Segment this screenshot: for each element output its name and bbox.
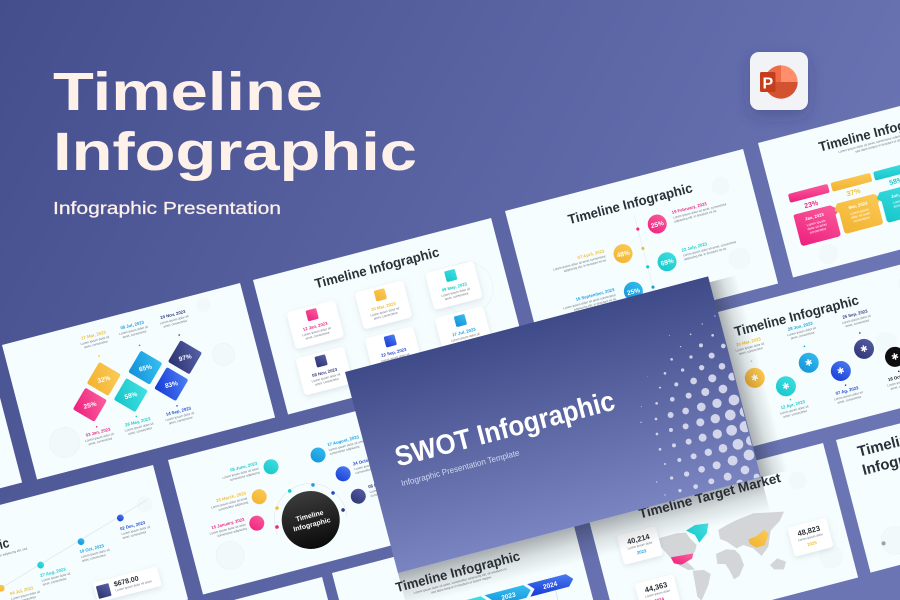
label: 08 Jul — [117, 319, 152, 350]
milestone: 08 June: consectetur adipiscing — [229, 470, 260, 482]
panel: world map slide — [585, 443, 858, 600]
stat card: 44,363: Lorem ipsum dolor — [645, 588, 671, 599]
stat card: 40,214 — [617, 526, 663, 565]
stat card: 48,823 — [787, 518, 834, 557]
milestone: 28 Jun: amet, consectetur — [790, 330, 815, 340]
milestone: 07 Aug: amet, consectetur — [837, 395, 862, 405]
milestone: 12 Apr: 12 Apr, 2023 — [780, 399, 806, 410]
panel: card timeline slide — [253, 218, 526, 415]
milestone: 20 Mar: amet, consectetur — [738, 346, 763, 356]
milestone: 10 Oct: amet, consectetur — [81, 553, 106, 563]
milestone: 69% July: 69% — [660, 258, 675, 268]
milestone: 08 June: Lorem ipsum dolor sit amet — [222, 466, 259, 480]
milestone: 48% April: adipiscing elit, in tincidunt mi mi. — [563, 258, 607, 273]
column: 37% Mar — [828, 171, 888, 235]
title — [856, 424, 900, 479]
label: 08 Jul: 08 Jul, 2023 — [120, 319, 145, 331]
title: Timeline Target Market — [637, 470, 783, 521]
milestone: 25% February: 25% — [650, 220, 665, 230]
diamond: 97%: 97% — [178, 353, 193, 363]
card: 17 Jul: amet, consectetur — [454, 336, 479, 346]
milestone: 25% September: Lorem ipsum dolor sit amet consectetur — [563, 293, 616, 310]
column: 37% Mar: consectetur — [853, 215, 871, 223]
milestone: 02 Dec: amet, consectetur — [122, 530, 147, 540]
milestone: 28 Jun — [785, 320, 827, 376]
panel: diagonal line timeline slide — [0, 465, 188, 600]
milestone: 27 Aug — [37, 555, 72, 587]
diamond: 83%: 83% — [164, 380, 179, 390]
milestone: 02 Dec: Lorem ipsum dolor sit — [121, 525, 151, 536]
milestone: 48% April — [551, 238, 647, 281]
panel: vertical circle timeline slide — [505, 149, 778, 346]
milestone: 08 June: 08 June, 2023 — [229, 461, 258, 473]
world map — [658, 512, 786, 600]
diamond: 25%: 25% — [83, 401, 98, 411]
label: 20 Nov: 20 Nov, 2023 — [160, 309, 186, 320]
intro text: Lorem ipsum dolor sit amet, consectetur adipiscing elit, sit tincidunt mi — [413, 567, 507, 595]
card: 17 Jul — [435, 306, 493, 355]
hero subtitle: Infographic Presentation Template — [400, 447, 521, 488]
milestone: 15 January: consectetur adipiscing — [217, 526, 248, 538]
title: Timeline Infographic — [733, 292, 861, 339]
milestone: 07 Aug: Lorem ipsum dolor sit — [834, 390, 863, 402]
diamond: 32% — [82, 357, 125, 400]
title: Timeline Infographic — [566, 180, 694, 227]
label: 03 Jan: 03 Jan, 2023 — [85, 426, 112, 438]
card: 08 Nov: Lorem ipsum dolor sit — [311, 372, 341, 383]
milestone: 24 October: consectetur adipiscing — [355, 463, 386, 475]
milestone: 25 Sep: Lorem ipsum dolor sit — [842, 314, 871, 325]
milestone: 12 Apr: amet, consectetur — [783, 409, 808, 419]
label: 03 Jan: amet, consectetur — [88, 436, 113, 446]
milestone: 20 Mar: ✱ — [750, 372, 760, 384]
arrow: 2024: 2024 — [542, 581, 559, 591]
label: 14 Sep — [162, 401, 196, 426]
milestone: 18 Oct: ✱ — [890, 351, 900, 363]
label: 17 Mar — [79, 329, 114, 360]
diamond: 65% — [124, 346, 167, 389]
milestone: 07 Aug: 07 Ag, 2023 — [835, 385, 860, 396]
panel: radial timeline slide — [168, 398, 441, 595]
milestone: 15 January: 15 January, 2023 — [211, 517, 246, 530]
milestone: 17 August — [308, 433, 367, 464]
label: 26 May: 26 May, 2023 — [125, 416, 152, 427]
milestone: yellow — [0, 576, 42, 600]
panel: diamond timeline slide — [2, 283, 275, 480]
milestone: 25% February — [634, 196, 729, 239]
card: 08 Nov: amet, consectetur — [315, 377, 339, 387]
stat card: 44,363: 44,363 — [644, 580, 668, 594]
milestone: 25% September: 15 September, 2023 — [575, 287, 616, 302]
diamond: 97% — [163, 336, 207, 379]
title: Timeline Infographic — [394, 548, 522, 595]
milestone: 20 Mar: 20 Mar, 2023 — [736, 336, 762, 347]
milestone: 69% July: Lorem ipsum dolor sit amet, consectetur — [682, 240, 737, 258]
panel: far-left slide — [0, 348, 22, 545]
subtitle: Infographic Presentation — [53, 198, 281, 218]
milestone: 28 Jun: 28 Jun, 2023 — [787, 320, 814, 332]
diamond: 58% — [109, 374, 152, 417]
column: 23% Jan: 23% — [804, 200, 820, 210]
milestone: 25 Sep: 25 Sep, 2023 — [842, 308, 869, 320]
milestone: 08 December: 08 December, 2023 — [368, 475, 407, 489]
card: 30 Mar: Lorem ipsum dolor sit — [370, 306, 400, 317]
milestone: 25 Sep — [840, 308, 881, 362]
card: 30 Mar: 30 Mar, 2023 — [371, 301, 397, 312]
diamond: 65%: 65% — [138, 363, 153, 374]
card: 09 May: 09 May, 2023 — [441, 281, 468, 293]
milestone: 24 October — [333, 452, 393, 483]
milestone: 08 December — [349, 475, 410, 505]
milestone: 69% July — [644, 234, 739, 276]
milestone: 17 August: Lorem ipsum dolor sit amet — [328, 439, 365, 452]
milestone: yellow: 04 Jul, 2023 — [9, 585, 34, 596]
label: 20 Nov: Lorem ipsum dolor sit — [159, 314, 189, 325]
milestone: 48% April: 07 April, 2023 — [577, 248, 605, 260]
label: 03 Jan: Lorem ipsum dolor sit — [85, 432, 114, 443]
label: 17 Mar: 17 Mar, 2023 — [81, 329, 107, 341]
card: 09 May — [425, 261, 483, 310]
card: 12 Jan — [286, 300, 344, 349]
arrow: 2023 — [485, 584, 532, 600]
milestone: 25 Sep: ✱ — [859, 343, 869, 355]
label: 08 Jul: Lorem ipsum dolor sit — [119, 325, 149, 336]
arrow: 2022 — [444, 595, 490, 600]
milestone: 15 January — [208, 512, 266, 543]
centre circle — [275, 485, 346, 555]
diamond: 83% — [150, 363, 193, 406]
milestone: 25 Sep: amet, consectetur — [845, 318, 870, 328]
card: 08 Nov: 08 Nov, 2023 — [312, 367, 338, 378]
milestone: 20 Mar — [734, 336, 775, 391]
milestone: 48% April: Lorem ipsum dolor sit amet consectetur — [553, 254, 606, 272]
column: 37% Mar: 37% — [846, 188, 862, 198]
card: 09 May: Lorem ipsum dolor sit — [441, 287, 471, 298]
column: 37% Mar: Mar, 2023 — [848, 200, 869, 210]
milestone: 25% February: adipiscing elit, in tincidunt mi mi. — [674, 209, 718, 224]
milestone: 12 Apr — [771, 372, 810, 420]
label: 20 Nov: amet, consectetur — [163, 319, 188, 329]
heading: Timeline Infographic — [53, 62, 417, 182]
milestone: 02 Dec — [116, 508, 152, 540]
label: 03 Jan — [82, 422, 115, 447]
stat card: 48,823: 2025 — [807, 540, 818, 547]
diamond: 58%: 58% — [124, 391, 138, 401]
panel: hero SWOT slide — [345, 269, 797, 600]
column: 23% Jan — [788, 183, 846, 246]
label: 20 Nov — [158, 308, 193, 340]
column: 58% Jun — [870, 161, 900, 224]
column: 37% Mar: dolor sit amet — [851, 211, 871, 220]
stat card: $678.00: Lorem ipsum dolor sit amet — [115, 579, 152, 592]
milestone: 25% September: 25% — [626, 287, 641, 297]
milestone: 20 Mar: Lorem ipsum dolor sit — [735, 341, 765, 353]
milestone: 28 Jun: Lorem ipsum dolor sit — [787, 326, 817, 337]
stat card: 44,363 — [635, 574, 681, 600]
arrow: 2024 — [527, 573, 575, 597]
column: 23% Jan: consectetur — [809, 226, 828, 235]
milestone: 15 January: Lorem ipsum dolor sit amet — [209, 523, 246, 536]
card: 12 Jan: amet, consectetur — [305, 330, 330, 341]
stat card: 40,214: Lorem ipsum dolor — [627, 540, 653, 551]
panel: zigzag circles slide — [718, 250, 900, 447]
orbit ring and dots — [266, 475, 348, 535]
milestone: 69% July: 22 July, 2023 — [681, 241, 708, 253]
card: 30 Mar — [355, 280, 412, 330]
column: 23% Jan: dolor sit amet — [807, 222, 827, 231]
label: 17 Mar: Lorem ipsum dolor sit — [80, 335, 110, 346]
label: 14 Sep: Lorem ipsum dolor sit — [165, 411, 195, 422]
milestone: 20 March: Lorem ipsum dolor sit amet — [211, 496, 248, 510]
panel: arrow timeline slide — [332, 511, 605, 600]
milestone: 24 October: 24 October, 2023 — [352, 453, 387, 466]
milestone: 02 Dec: 02 Dec, 2023 — [119, 520, 146, 531]
hero title: SWOT Infographic — [391, 385, 618, 472]
panel: two-line title slide — [836, 378, 900, 573]
card: 22 Sep: amet, consectetur — [384, 357, 409, 367]
milestone: 10 Oct: Lorem ipsum dolor sit — [80, 548, 110, 559]
stat card: $678.00: $678.00 — [113, 575, 140, 589]
card: 12 Jan: Lorem ipsum dolor sit — [302, 326, 332, 337]
stat card: 40,214: 40,214 — [626, 532, 651, 546]
stat card: $678.00 — [93, 566, 162, 600]
card: 30 Mar: amet, consectetur — [373, 311, 398, 321]
card: 17 Jul: Lorem ipsum dolor sit — [450, 332, 480, 343]
column: 23% Jan: Jan, 2023 — [804, 212, 825, 222]
intro text: sed diam tempor in tincidunt ut dolore magna — [431, 575, 492, 595]
column: 37% Mar: Lorem ipsum — [850, 207, 870, 216]
card: 22 Sep: 22 Sep, 2023 — [381, 347, 407, 358]
card: 12 Jan: 12 Jan, 2023 — [302, 321, 329, 332]
milestone: 07 Aug — [825, 357, 864, 405]
milestone: 08 June — [220, 456, 280, 487]
label: 26 May: amet, consectetur — [128, 426, 153, 436]
milestone: 12 Apr: ✱ — [781, 380, 791, 392]
diamond: 32%: 32% — [97, 375, 111, 385]
milestone: 24 October: Lorem ipsum dolor sit amet — [354, 458, 391, 471]
label: 17 Mar: amet, consectetur — [83, 339, 108, 349]
milestone: 27 Aug: 27 Aug, 2023 — [40, 566, 67, 578]
heading: Timeline Infographic: Infographic — [53, 122, 417, 182]
label: 14 Sep: 14 Sep, 2023 — [165, 405, 192, 417]
column: 23% Jan: Lorem ipsum — [806, 219, 826, 227]
card: 17 Jul: 17 Jul, 2023 — [452, 326, 477, 337]
icon: PowerPoint logo — [750, 52, 808, 110]
icon: PowerPoint logo: P — [762, 75, 773, 92]
stat card: 48,823: 48,823 — [797, 524, 821, 538]
milestone: 08 December: Lorem ipsum dolor sit amet — [369, 481, 406, 494]
card: 08 Nov — [295, 346, 353, 396]
milestone: 27 Aug: amet, consectetur — [42, 577, 67, 587]
label: 08 Jul: amet, consectetur — [122, 329, 147, 339]
milestone: 20 March — [209, 486, 268, 516]
label: 14 Sep: amet, consectetur — [168, 415, 193, 425]
milestone: 48% April: 48% — [616, 250, 631, 260]
milestone: 10 Oct — [76, 532, 111, 563]
stat card: 48,823: Lorem ipsum dolor — [797, 532, 823, 542]
milestone: 17 August: consectetur adipiscing — [329, 444, 360, 456]
milestone: 27 Aug: Lorem ipsum dolor sit — [41, 571, 71, 583]
milestone: 20 March: consectetur adipiscing — [218, 500, 249, 512]
milestone: 69% July: adipiscing elit, in tincidunt mi mi. — [683, 246, 727, 261]
card: 22 Sep: Lorem ipsum dolor sit — [380, 352, 410, 363]
halftone dots — [640, 315, 760, 496]
centre circle: Infographic — [293, 517, 332, 533]
milestone: 10 Oct: 10 Oct, 2023 — [79, 543, 105, 554]
centre circle: Timeline — [295, 510, 324, 524]
label: 26 May: Lorem ipsum dolor sit — [124, 421, 154, 433]
panel: ribbon columns slide — [758, 81, 900, 278]
card: 22 Sep — [364, 326, 422, 376]
milestone: 20 March: 20 March, 2023 — [216, 490, 247, 503]
heading: Timeline Infographic: Timeline — [53, 62, 323, 122]
milestone: 25% February: Lorem ipsum dolor sit amet, consectetur — [673, 202, 727, 220]
title: Timeline Infographic — [313, 244, 441, 291]
milestone: 17 August: 17 August, 2023 — [327, 434, 360, 447]
milestone: 08 December: consectetur adipiscing — [370, 486, 401, 498]
milestone: 25% September: adipiscing elit, in tincidunt mi mi. — [573, 297, 617, 312]
diamond: 25% — [68, 383, 111, 426]
milestone: 25% February: 19 February, 2023 — [671, 201, 708, 215]
card: 09 May: amet, consectetur — [444, 291, 469, 301]
milestone: 25% September — [561, 277, 657, 319]
panel: lower-left slide — [84, 577, 357, 600]
milestone: 28 Jun: ✱ — [804, 357, 814, 369]
label: 26 May — [122, 412, 155, 437]
milestone: 12 Apr: Lorem ipsum dolor sit — [779, 404, 809, 416]
stat card: 40,214: 2023 — [636, 548, 647, 555]
milestone: 07 Aug: ✱ — [836, 365, 846, 377]
milestone: 18 Oct — [878, 343, 900, 392]
